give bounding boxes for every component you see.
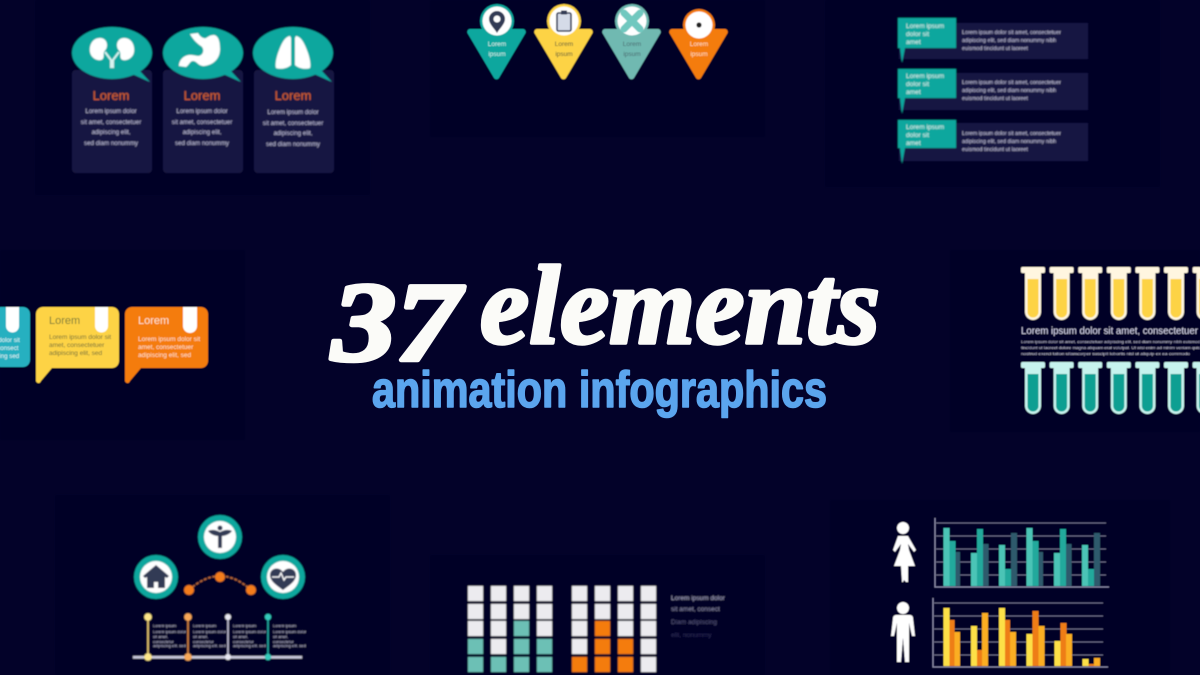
timeline text: adipiscing elit, sed	[273, 643, 306, 648]
panel: organ speech bubbles	[35, 0, 370, 195]
timeline text: Lorem ipsum dolor	[233, 629, 267, 634]
row three	[898, 120, 1088, 164]
row three: amet	[906, 140, 921, 147]
text: column one: sit amet, consectetuer	[81, 119, 141, 126]
marker: sage bandage: Lorem	[623, 41, 641, 48]
row three: euismod tincidunt ut laoreet	[962, 147, 1028, 153]
row two: adipiscing elit, sed diam nonummy nibh	[962, 88, 1056, 94]
timeline text: Lorem ipsum dolor	[153, 629, 187, 634]
text: column one: sed diam nonummy	[84, 140, 139, 147]
row two	[898, 69, 1088, 114]
bubble: kidneys	[72, 27, 152, 82]
row three: Lorem ipsum dolor sit amet, consectetuer	[962, 131, 1061, 137]
timeline text: consectetur	[153, 639, 174, 644]
text: fading caption: Diam adipiscing	[671, 619, 717, 626]
row one: Lorem ipsum dolor sit amet, consectetuer	[962, 30, 1061, 36]
text: column two: sit amet, consectetuer	[172, 119, 232, 126]
text: column two: Lorem ipsum dolor	[176, 108, 228, 115]
icon: house	[134, 555, 178, 599]
timeline text: consectetur	[273, 639, 294, 644]
timeline text: Lorem ipsum dolor	[193, 629, 227, 634]
row one: dolor sit	[906, 31, 929, 38]
timeline text: consectetur	[233, 639, 254, 644]
row three: adipiscing elit, sed diam nonummy nibh	[962, 139, 1056, 145]
text: column two: Lorem	[184, 88, 220, 103]
timeline text: adipiscing elit, sed	[193, 643, 226, 648]
bubble: stomach	[163, 27, 243, 82]
grid: orange	[572, 586, 656, 672]
marker: yellow clipboard: ipsum	[555, 51, 573, 58]
text: column one: adipiscing elit,	[92, 129, 131, 136]
timeline text: sit amet,	[233, 634, 248, 639]
row one: euismod tincidunt ut laoreet	[962, 46, 1028, 52]
marker: teal location	[467, 4, 526, 79]
timeline text: consectetur	[193, 639, 214, 644]
text: column three: Lorem ipsum dolor	[267, 109, 319, 116]
marker: sage bandage: ipsum	[623, 51, 641, 58]
title: 37 elements: 37	[331, 261, 465, 385]
timeline text: Lorem ipsum	[273, 623, 297, 628]
timeline text: adipiscing elit, sed	[153, 643, 186, 648]
text: column two: adipiscing elit,	[183, 129, 222, 136]
text: fading caption: elit, nonummy	[671, 632, 712, 639]
text: tube description: Lorem ipsum dolor sit amet, consectetuer adipiscing elit, sed diam nonummy nibh euismod	[1021, 339, 1200, 344]
row two: euismod tincidunt ut laoreet	[962, 96, 1028, 102]
icon: woman	[893, 522, 916, 582]
text: tube description	[1021, 326, 1200, 356]
row one: amet	[906, 39, 921, 46]
text: column one: Lorem	[93, 88, 129, 103]
timeline text: adipiscing elit, sed	[233, 643, 266, 648]
text: fading caption: Lorem ipsum dolor	[671, 595, 726, 602]
panel: gender bar charts	[830, 500, 1170, 675]
text: column three: sed diam nonummy	[266, 141, 321, 148]
title: 37 elements	[331, 244, 880, 385]
row two: Lorem ipsum	[906, 73, 945, 80]
card: orange: Lorem ipsum dolor sit	[138, 336, 200, 343]
card: yellow: amet, consectetuer	[49, 342, 105, 349]
marker: yellow clipboard	[534, 4, 593, 79]
row two: amet	[906, 89, 921, 96]
row three: Lorem ipsum	[906, 124, 945, 131]
card: yellow: Lorem	[49, 315, 80, 327]
bubble: lungs	[253, 27, 333, 82]
panel: test tubes	[950, 250, 1200, 432]
text: tube description: nostrud exerci tation ullamcorper suscipit lobortis nisl ut aliquip ex ea commodo	[1021, 351, 1190, 356]
row one	[898, 18, 1088, 63]
icon: man	[891, 602, 915, 662]
arc with dots	[184, 572, 256, 595]
card: blue	[0, 307, 30, 367]
tubes: yellow row	[1021, 267, 1200, 320]
text: column three	[263, 88, 323, 148]
row one: adipiscing elit, sed diam nonummy nibh	[962, 38, 1056, 44]
marker: orange drop: Lorem	[690, 41, 708, 48]
timeline	[133, 613, 302, 661]
marker: yellow clipboard: Lorem	[555, 41, 573, 48]
timeline text: Lorem ipsum	[193, 623, 217, 628]
card: orange	[125, 307, 208, 383]
marker: sage bandage	[602, 4, 661, 79]
text: column one: Lorem ipsum dolor	[85, 108, 137, 115]
timeline text: sit amet,	[193, 634, 208, 639]
grid: teal	[468, 586, 552, 672]
marker: orange drop	[669, 9, 728, 79]
card: orange: adipiscing elit, sed	[138, 352, 191, 359]
timeline text: sit amet,	[273, 634, 288, 639]
icon: caduceus	[198, 515, 242, 559]
text: tube description: tincidunt ut laoreet dolore magna aliquam erat volutpat. Ut wisi enim ad minim veniam quis	[1021, 345, 1200, 350]
row two: Lorem ipsum dolor sit amet, consectetuer	[962, 80, 1061, 86]
panel: coloured speech cards	[0, 250, 245, 440]
marker: teal location: ipsum	[488, 51, 506, 58]
row one: Lorem ipsum	[906, 23, 945, 30]
timeline text: sit amet,	[153, 634, 168, 639]
panel: triangle markers	[430, 0, 765, 137]
timeline text: Lorem ipsum	[233, 623, 257, 628]
card: orange: Lorem	[138, 315, 169, 327]
text: column one	[81, 88, 141, 147]
chart: orange bars	[933, 598, 1108, 667]
card: orange: amet, consectetuer	[138, 344, 194, 351]
chart: teal bars	[935, 518, 1109, 587]
panel: icon timeline	[55, 495, 390, 675]
text: column three: sit amet, consectetuer	[263, 120, 323, 127]
timeline text	[153, 623, 307, 648]
marker: teal location: Lorem	[488, 41, 506, 48]
row two: dolor sit	[906, 81, 929, 88]
text: column three: adipiscing elit,	[274, 130, 313, 137]
icon: heart	[261, 555, 305, 599]
panel: teal callout list	[825, 0, 1160, 187]
panel: square grids	[430, 555, 765, 675]
timeline text: Lorem ipsum dolor	[273, 629, 307, 634]
card: yellow: adipiscing elit, sed	[49, 350, 102, 357]
card: yellow: Lorem ipsum dolor sit	[49, 334, 111, 341]
text: fading caption	[671, 595, 726, 639]
subtitle: animation infographics: animation infographics	[372, 361, 827, 418]
text: fading caption: sit amet, consect	[671, 606, 720, 613]
text: column two	[172, 88, 232, 147]
tubes: teal row	[1021, 362, 1200, 414]
card: yellow	[36, 307, 119, 383]
marker: orange drop: ipsum	[690, 51, 708, 58]
timeline text: Lorem ipsum	[153, 623, 177, 628]
row three: dolor sit	[906, 132, 929, 139]
title: 37 elements: elements	[480, 244, 880, 368]
text: column two: sed diam nonummy	[175, 140, 230, 147]
text: column three: Lorem	[275, 88, 311, 103]
